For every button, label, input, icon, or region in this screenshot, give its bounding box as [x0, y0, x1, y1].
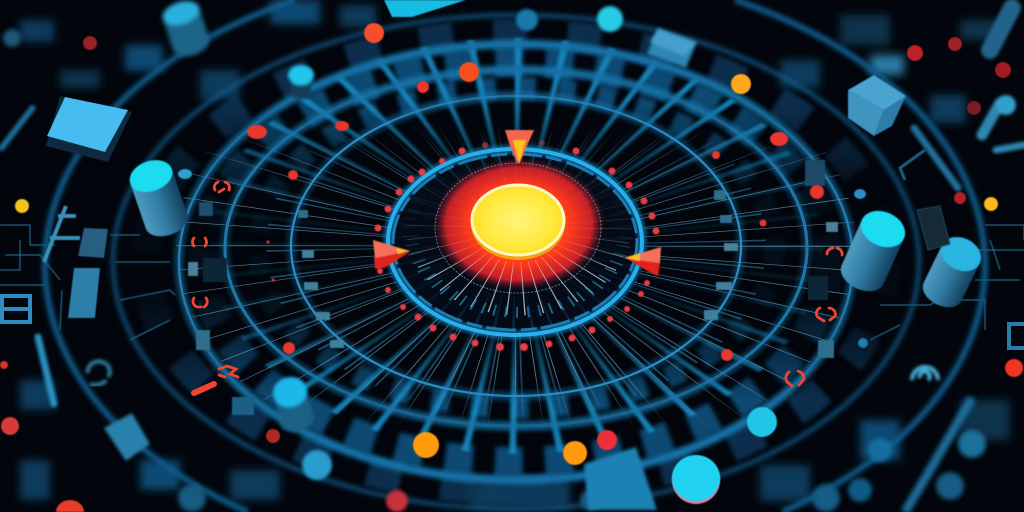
cylinder: left large	[125, 155, 192, 242]
cylinder: right front	[836, 204, 911, 298]
chips: left stack	[68, 228, 108, 318]
inner well spokes	[415, 164, 615, 312]
chip: right dark	[917, 206, 950, 250]
cylinder: right edge	[982, 8, 1024, 150]
ring: inner bright ring	[388, 149, 642, 335]
cube: lower left tile	[104, 413, 150, 461]
cube: top ring	[647, 28, 697, 68]
inner dark well	[391, 150, 639, 332]
red dots: ring nodes	[247, 81, 824, 443]
core disc	[471, 185, 565, 260]
core thin dotted ring	[435, 163, 601, 293]
cube: bottom	[584, 447, 657, 510]
blue traces and bars	[0, 106, 1024, 512]
chip tiles on rings	[188, 160, 838, 415]
core spokes	[410, 144, 626, 312]
cylinder: small top ring	[288, 65, 314, 99]
red glyph marks	[192, 182, 842, 393]
rings: sharp layer	[178, 87, 852, 428]
cylinder: top left	[160, 0, 213, 61]
arrow: top marker	[505, 130, 534, 163]
band tiles	[146, 34, 886, 490]
radial spokes: thick soft	[298, 98, 734, 394]
cube: flat cyan tile	[46, 96, 132, 162]
cylinder: lower left	[270, 373, 316, 435]
cylinder: right rear	[918, 230, 987, 314]
red dots: inner node ring	[374, 140, 660, 351]
radial spokes: thin sharp	[281, 86, 751, 406]
arrow: right marker	[624, 247, 661, 276]
core glow	[433, 158, 605, 290]
circuit texture: side traces	[0, 225, 1024, 340]
cube: upper right	[848, 75, 906, 136]
arrow: left marker	[373, 240, 410, 269]
cube: top cyan tile	[384, 0, 466, 17]
rings: soft glow layer	[179, 44, 853, 480]
